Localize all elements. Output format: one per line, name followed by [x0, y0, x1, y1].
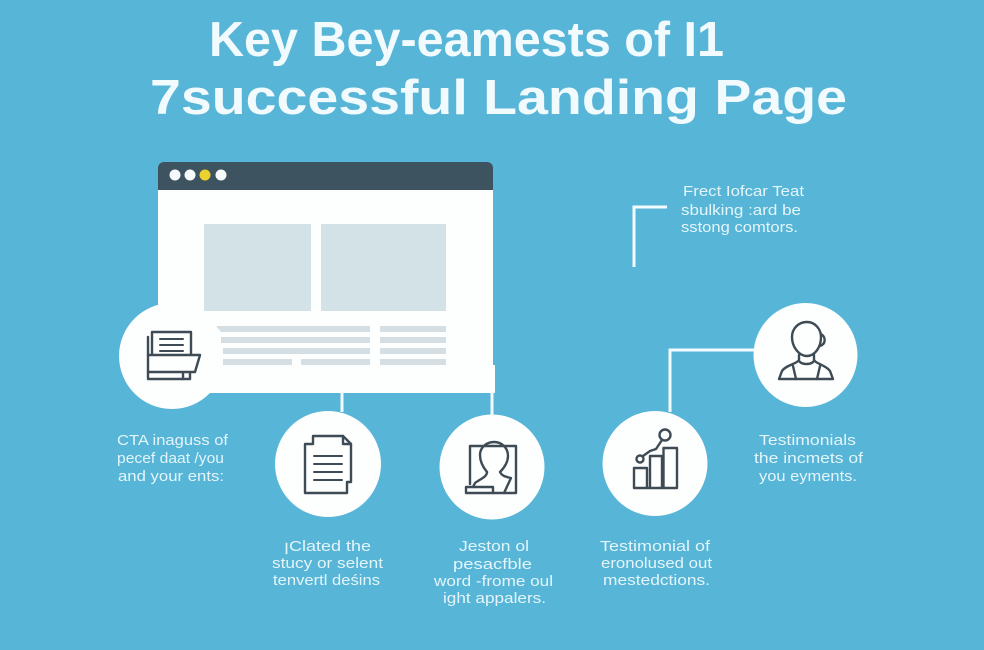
- text: step 3 caption: ight appalers.: [443, 590, 546, 607]
- text: step 3 caption: Jeston ol: [459, 538, 529, 555]
- text: step 2 caption: [272, 538, 384, 589]
- step 3: circle with portrait icon: [440, 414, 544, 520]
- text: step 5 caption: Testimonials: [759, 432, 856, 449]
- image placeholder left: [204, 224, 311, 311]
- text: step 5 caption: [754, 432, 864, 485]
- step 1 circle: [119, 303, 225, 409]
- text: step 5 caption: you eyments.: [759, 468, 857, 485]
- image placeholder right: [321, 224, 446, 311]
- title: 7successful Landing Page: [150, 71, 847, 125]
- callout: top right note: [634, 183, 805, 267]
- title: [150, 13, 847, 125]
- text line placeholders: [216, 326, 446, 365]
- text: step 2 caption: stucy or selent: [272, 555, 384, 572]
- text: step 5 caption: the incmets of: [754, 450, 864, 467]
- callout: top right note: sbulking :ard be: [681, 202, 801, 219]
- text: step 1 caption: [117, 432, 229, 485]
- icon: person with headset: [779, 322, 833, 379]
- icon: document: [305, 436, 351, 493]
- text: step 4 caption: mestedctions.: [603, 572, 710, 589]
- browser title bar: [158, 162, 493, 190]
- text: step 2 caption: ꞁClated the: [284, 538, 371, 555]
- text: step 1 caption: and your ents:: [118, 468, 224, 485]
- text: step 1 caption: pecef daat /you: [117, 450, 224, 467]
- title: Key Bey-eamests of I1: [209, 13, 724, 67]
- callout: top right note: Frect Iofcar Teat: [683, 183, 805, 200]
- text: step 4 caption: eronolused out: [601, 555, 713, 572]
- window control dots: [170, 170, 226, 180]
- text: step 3 caption: [433, 538, 553, 607]
- step 2: circle with document icon: [275, 411, 381, 517]
- connector lines: [342, 350, 756, 417]
- panel: browser window mockup: [158, 162, 495, 393]
- text: step 2 caption: tenvertl deśins: [273, 572, 380, 589]
- text: step 1 caption: CTA inaguss of: [117, 432, 229, 449]
- step 4: circle with growth chart icon: [602, 411, 708, 516]
- icon: bar chart with trend: [634, 430, 677, 488]
- text: step 4 caption: Testimonial of: [600, 538, 711, 555]
- step 5: circle with person icon: [754, 303, 858, 407]
- text: step 3 caption: pesacfble: [453, 556, 532, 573]
- callout: top right note: sstong comtors.: [681, 219, 798, 236]
- text: step 3 caption: word -frome oul: [433, 573, 553, 590]
- text: step 4 caption: [600, 538, 713, 589]
- icon: portrait frame: [466, 442, 516, 493]
- icon: book: [148, 332, 200, 379]
